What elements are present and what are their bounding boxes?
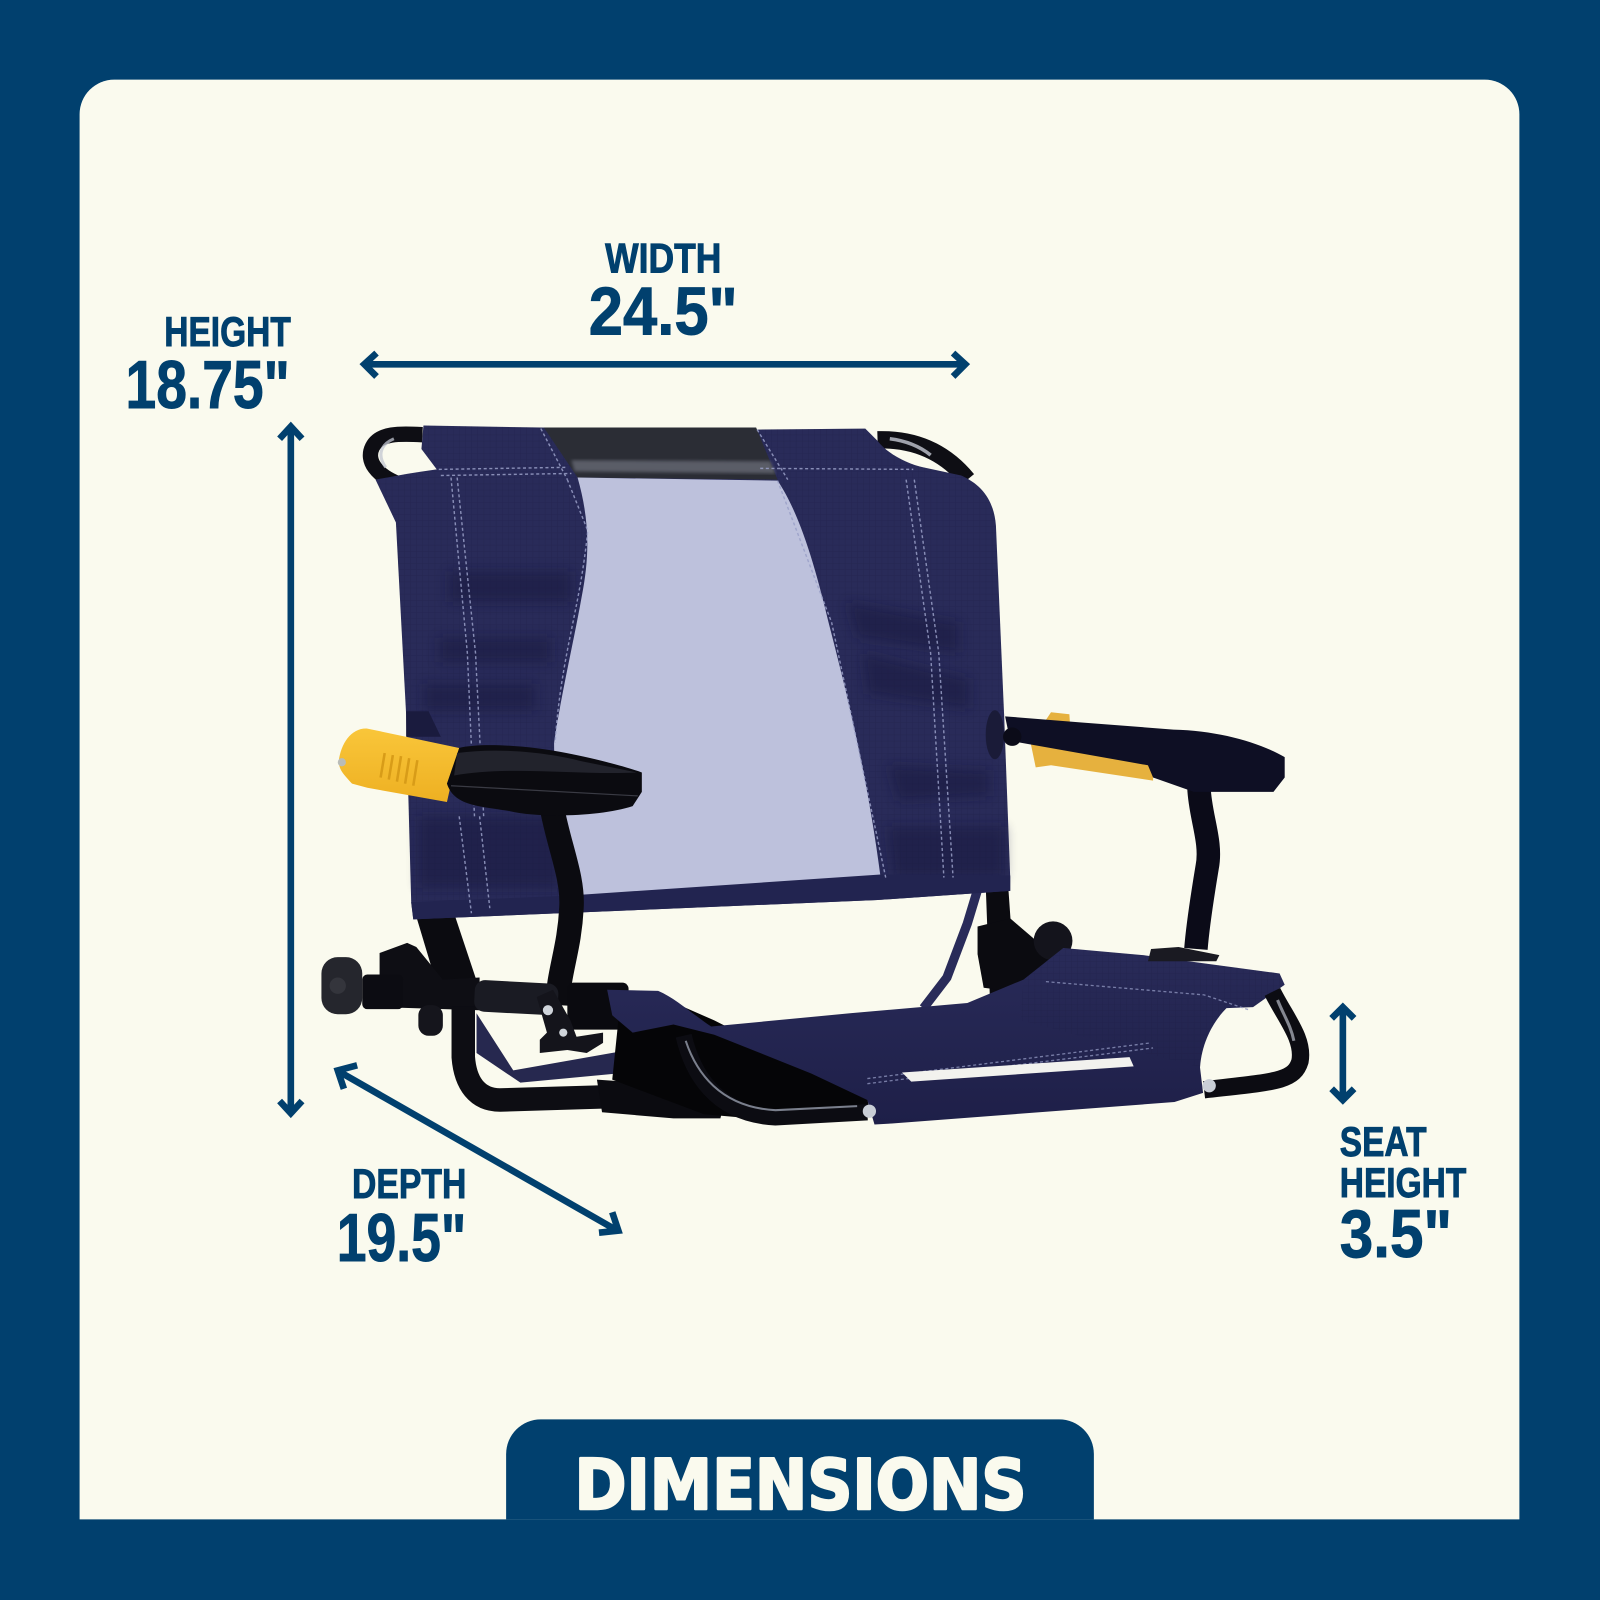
bottom hem [411, 874, 1010, 919]
chair illustration [321, 426, 1301, 1124]
backrest fabric [376, 426, 1010, 919]
label: seat height: 3.5" [1340, 1197, 1452, 1272]
backrest frame tubes [370, 434, 422, 484]
left armrest [447, 745, 642, 815]
black space under seat [612, 998, 869, 1120]
title tab: dimensions: DIMENSIONS [574, 1446, 1027, 1526]
mesh panel [554, 478, 881, 900]
arrow: depth [338, 1065, 618, 1233]
bracket and knob [380, 943, 480, 1010]
left side adjusting mechanism [321, 943, 722, 1118]
label: depth: 19.5" [337, 1201, 466, 1276]
label: width [589, 234, 738, 350]
arrow: seat height [1332, 1007, 1354, 1100]
back legs and right hinge [415, 886, 1072, 995]
label: seat height [1340, 1118, 1467, 1272]
hinge block [567, 983, 629, 1030]
straps under seat [477, 1013, 617, 1083]
rear strap [923, 890, 978, 1008]
right arm support tube [1196, 788, 1208, 949]
seat front left tube [684, 1036, 867, 1117]
label: seat height: SEAT [1340, 1118, 1427, 1165]
left arm yellow handle [338, 729, 459, 802]
seat fabric [607, 948, 1285, 1124]
fabric wrinkles [418, 571, 1005, 888]
right arm yellow handle [1031, 712, 1153, 781]
arm strap loop on back [406, 711, 441, 737]
main side tube [463, 1006, 602, 1100]
seat right tube [1204, 992, 1301, 1090]
arrow: height [280, 427, 302, 1113]
right armrest [1005, 716, 1285, 792]
label: height: 18.75" [126, 348, 290, 423]
label: height [126, 308, 291, 423]
title tab: dimensions [506, 1419, 1094, 1526]
label: depth: DEPTH [352, 1160, 466, 1207]
left arm support tube [552, 808, 572, 1005]
label: width: WIDTH [605, 234, 721, 281]
label: depth [337, 1160, 466, 1276]
padded tube [474, 980, 559, 1016]
label: height: HEIGHT [164, 308, 291, 355]
stitching [439, 429, 953, 913]
label: seat height: HEIGHT [1340, 1159, 1467, 1206]
label: width: 24.5" [589, 275, 738, 350]
arrow: width [364, 353, 965, 377]
clear top window [544, 428, 778, 480]
seat label [902, 1057, 1134, 1082]
seat stitching [867, 982, 1250, 1084]
